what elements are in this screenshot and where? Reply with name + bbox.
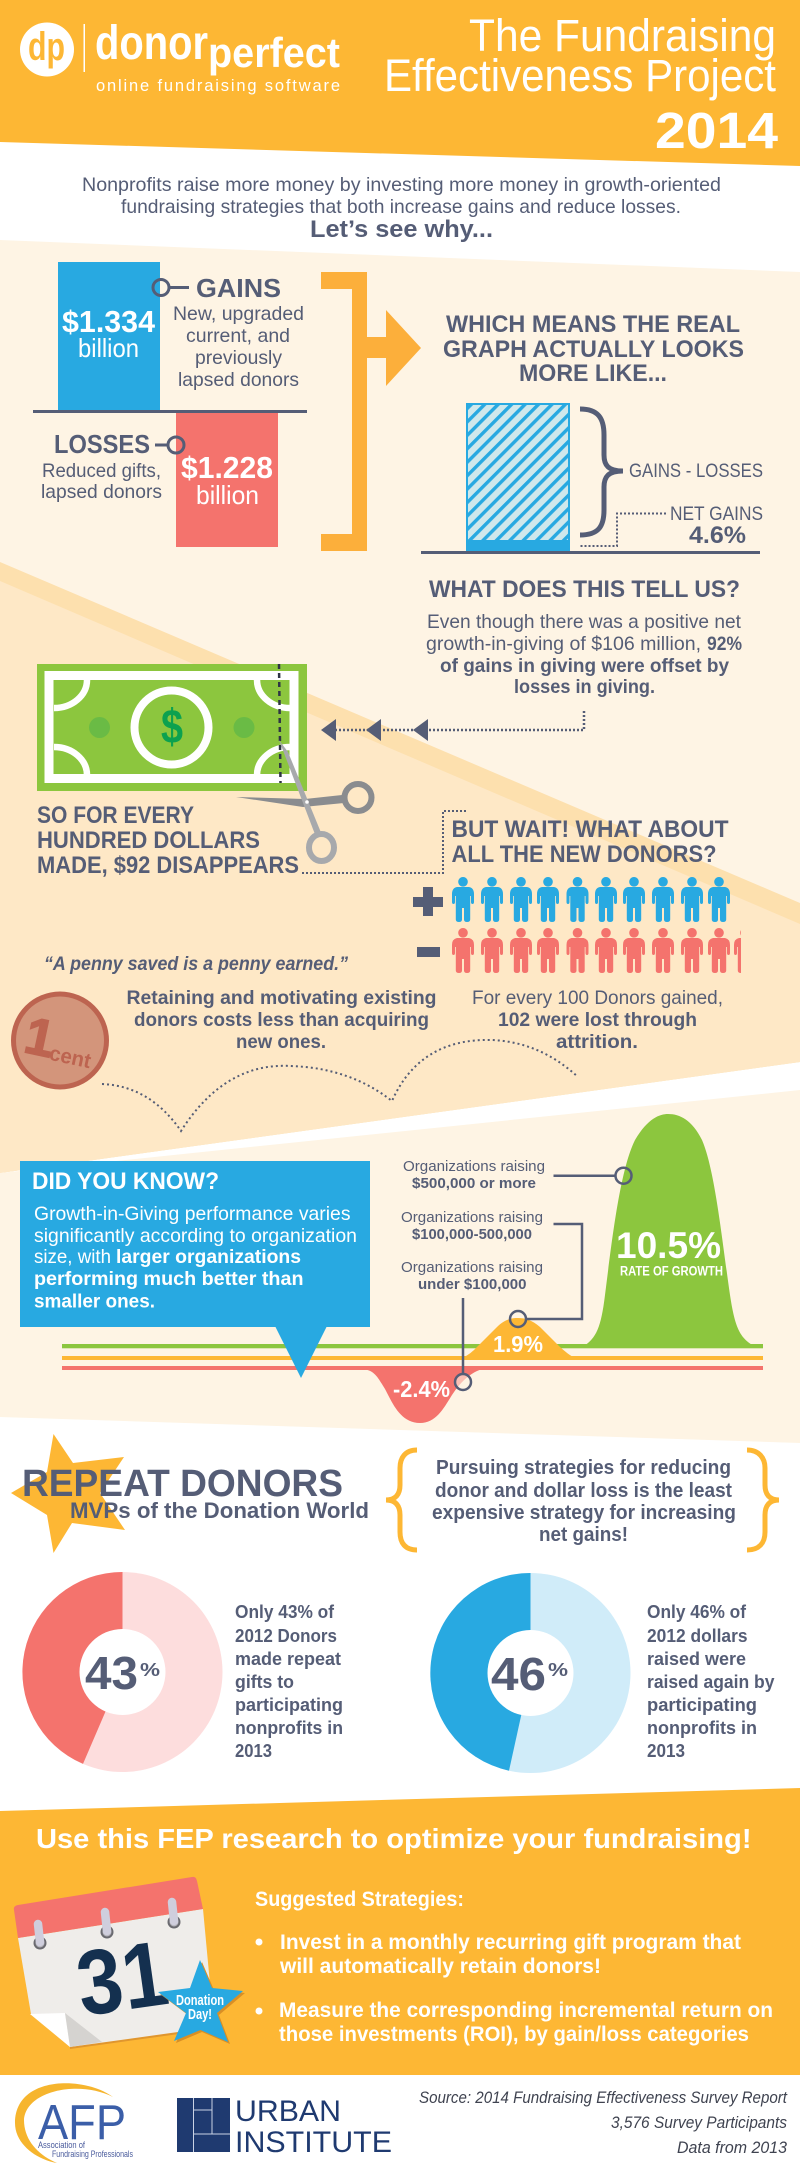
icon: star behind heading	[11, 1434, 125, 1553]
heading: use this research: Use this FEP research to optimize your fundraising!	[36, 1823, 751, 1854]
gains bar: billion	[78, 333, 139, 363]
callout: did you know: Growth-in-Giving performance varies	[34, 1203, 351, 1225]
callout: did you know: larger organizations	[116, 1246, 301, 1268]
callout: strategies in braces: donor and dollar loss is the least	[435, 1480, 732, 1502]
text: what does this tell us: Even though there was a positive net	[427, 611, 742, 633]
logo: AFP: AFP	[38, 2096, 126, 2150]
title: The Fundraising	[469, 10, 776, 61]
red dip: -2.4%	[393, 1376, 450, 1402]
source note: Data from 2013	[677, 2138, 787, 2157]
label: under $100,000: under $100,000	[418, 1276, 526, 1293]
heading: repeat donors: REPEAT DONORS	[22, 1463, 343, 1505]
callout: did you know: smaller ones.	[34, 1290, 155, 1312]
icon: dollar bill	[37, 664, 307, 791]
text: what does this tell us: of gains in giving were offset by	[440, 655, 729, 677]
dotted connector	[302, 811, 467, 873]
icon: donation day star: Donation	[176, 1992, 224, 2009]
text: 46% dollars raised: raised again by	[647, 1671, 775, 1692]
text: suggested strategies: Suggested Strategies:	[255, 1888, 464, 1911]
logo: Urban Institute	[177, 2095, 392, 2159]
net gains label: NET GAINS	[670, 503, 763, 525]
donut chart: 43%: 43	[85, 1647, 138, 1699]
text: suggested strategies: will automatically retain donors!	[279, 1955, 601, 1978]
callout: did you know	[20, 1161, 370, 1378]
losses bar: $1.228	[181, 450, 273, 485]
icon: donation day star	[158, 1960, 245, 2044]
logo: donorperfect: online fundraising software	[96, 77, 340, 95]
losses bar	[176, 412, 278, 547]
text: retaining donors	[126, 987, 436, 1053]
losses label	[41, 429, 184, 503]
donut chart: 43%: %	[140, 1660, 160, 1680]
donut chart: 46%: 46	[491, 1648, 546, 1700]
callout: did you know: DID YOU KNOW?	[32, 1168, 219, 1195]
icon: scissors	[236, 740, 372, 861]
intro text: Nonprofits raise more money by investing more money in growth-oriented	[82, 174, 721, 196]
label: $100,000-500,000: Organizations raising	[401, 1209, 543, 1226]
heading: real graph	[443, 311, 744, 387]
callout: did you know: size, with	[34, 1246, 111, 1268]
text: retaining donors: new ones.	[236, 1031, 326, 1053]
text: 43% repeat donors	[235, 1601, 343, 1761]
title	[384, 10, 779, 159]
text: 43% repeat donors: gifts to	[235, 1671, 294, 1692]
bracket arrow	[321, 272, 421, 551]
logo: Urban Institute: URBAN	[235, 2095, 341, 2128]
header banner	[0, 0, 800, 166]
text: 43% repeat donors: 2013	[235, 1740, 272, 1761]
losses label: LOSSES	[54, 429, 150, 459]
label: $500,000 or more	[403, 1158, 632, 1192]
text: 43% repeat donors: nonprofits in	[235, 1717, 343, 1738]
logo: AFP: Association of	[38, 2140, 85, 2151]
source note	[419, 2088, 788, 2157]
intro text: fundraising strategies that both increase gains and reduce losses.	[121, 196, 681, 218]
text: 43% repeat donors: made repeat	[235, 1648, 341, 1669]
icon: penny	[11, 992, 109, 1090]
heading: real graph: GRAPH ACTUALLY LOOKS	[443, 336, 744, 363]
logo: donorperfect: perfect	[208, 29, 340, 76]
callout: strategies in braces: net gains!	[539, 1524, 628, 1546]
text: 46% dollars raised: 2013	[647, 1740, 685, 1761]
orange peak: 1.9%	[493, 1331, 543, 1357]
callout: strategies in braces	[386, 1450, 779, 1550]
text: so for every hundred dollars	[37, 802, 299, 879]
gains label: current, and	[186, 325, 290, 347]
heading: real graph: WHICH MEANS THE REAL	[446, 311, 740, 338]
text: what does this tell us: WHAT DOES THIS TELL US?	[429, 576, 740, 603]
source note: 3,576 Survey Participants	[611, 2113, 787, 2132]
icon: dollar bill: $	[161, 701, 183, 754]
logo: AFP	[15, 2083, 133, 2163]
intro text	[82, 174, 721, 243]
people: donors gained	[452, 877, 730, 922]
calendar rings	[34, 1902, 180, 1948]
gains label: New, upgraded	[173, 303, 304, 325]
title: 2014	[655, 102, 779, 159]
text: 43% repeat donors: Only 43% of	[235, 1601, 335, 1622]
icon: penny: cent	[47, 1042, 93, 1073]
text: so for every hundred dollars: HUNDRED DOLLARS	[37, 827, 260, 854]
text: 43% repeat donors: 2012 Donors	[235, 1625, 337, 1646]
label: $500,000 or more: Organizations raising	[403, 1158, 545, 1175]
chart: net gains bar	[421, 404, 763, 554]
dotted bounce path	[102, 1040, 578, 1131]
text: attrition: For every 100 Donors gained,	[472, 987, 723, 1009]
text: attrition: 102 were lost through	[498, 1009, 697, 1031]
gains label: lapsed donors	[178, 369, 299, 391]
text: attrition: attrition.	[556, 1031, 638, 1053]
net gains label	[580, 503, 763, 549]
icon: donation day star: Day!	[188, 2006, 212, 2023]
callout: did you know: significantly according to organization	[34, 1225, 357, 1247]
brace: gains minus losses	[580, 409, 763, 535]
text: attrition	[472, 987, 723, 1053]
logo: donorperfect	[20, 17, 340, 95]
people: donors lost	[452, 928, 756, 973]
text: retaining donors: donors costs less than acquiring	[134, 1009, 429, 1031]
donut chart: 46%	[430, 1573, 630, 1773]
logo: donorperfect: dp	[28, 25, 65, 69]
heading: repeat donors	[22, 1463, 369, 1523]
losses label: Reduced gifts,	[42, 460, 161, 482]
callout: strategies in braces: Pursuing strategies for reducing	[436, 1457, 731, 1479]
callout: strategies in braces: expensive strategy for increasing	[432, 1502, 736, 1524]
text: what does this tell us: growth-in-giving of $106 million,	[426, 633, 701, 655]
brace: gains minus losses: GAINS - LOSSES	[629, 460, 763, 482]
logo: Urban Institute: INSTITUTE	[235, 2126, 392, 2159]
chart: growth by organization size	[62, 1114, 763, 1423]
dotted arrows	[321, 711, 584, 741]
text: what does this tell us: losses in giving.	[514, 676, 655, 698]
panel: call to action	[0, 1788, 800, 2075]
text: but wait	[452, 816, 729, 868]
icon: plus	[413, 887, 443, 916]
intro text: Let’s see why...	[310, 216, 493, 243]
green peak: 10.5%	[616, 1225, 721, 1266]
text: suggested strategies	[255, 1888, 773, 2046]
icon: penny: 1	[20, 1007, 60, 1069]
icon: minus	[417, 947, 440, 957]
logo: donorperfect: donor	[95, 17, 208, 70]
text: suggested strategies: Invest in a monthly recurring gift program that	[280, 1931, 741, 1954]
quote: “A penny saved is a penny earned.”	[44, 953, 348, 975]
text: what does this tell us	[426, 576, 742, 698]
chart: gains and losses	[33, 262, 307, 547]
text: 46% dollars raised: participating	[647, 1694, 757, 1715]
text: so for every hundred dollars: MADE, $92 DISAPPEARS	[37, 852, 299, 879]
green peak	[584, 1114, 754, 1346]
text: retaining donors: Retaining and motivating existing	[126, 987, 436, 1009]
text: so for every hundred dollars: SO FOR EVERY	[37, 802, 194, 829]
label: under $100,000: Organizations raising	[401, 1259, 543, 1276]
label: $500,000 or more: $500,000 or more	[412, 1175, 536, 1192]
growth lines	[62, 1344, 763, 1370]
gains label	[153, 273, 304, 391]
label: $100,000-500,000	[401, 1209, 582, 1327]
donut chart: 43%	[22, 1572, 223, 1772]
losses label: lapsed donors	[41, 481, 162, 503]
title: Effectiveness Project	[384, 50, 776, 101]
gains label: previously	[195, 347, 282, 369]
green peak: RATE OF GROWTH	[620, 1264, 723, 1278]
icon: calendar: 31	[71, 1922, 174, 2036]
text: what does this tell us: 92%	[707, 633, 742, 655]
label: under $100,000	[401, 1259, 543, 1390]
losses bar: billion	[196, 480, 259, 510]
heading: repeat donors: MVPs of the Donation World	[70, 1498, 369, 1523]
text: 46% dollars raised: Only 46% of	[647, 1601, 747, 1622]
text: 46% dollars raised	[647, 1601, 775, 1761]
gains bar: $1.334	[62, 304, 156, 339]
net gains label: 4.6%	[689, 522, 746, 549]
gains label: GAINS	[196, 273, 281, 303]
text: suggested strategies: those investments (ROI), by gain/loss categories	[279, 2023, 749, 2046]
text: 43% repeat donors: participating	[235, 1694, 343, 1715]
text: 46% dollars raised: raised were	[647, 1648, 746, 1669]
donut chart: 46%: %	[548, 1660, 568, 1680]
label: $100,000-500,000: $100,000-500,000	[412, 1226, 532, 1243]
text: 46% dollars raised: 2012 dollars	[647, 1625, 748, 1646]
text: but wait: BUT WAIT! WHAT ABOUT	[452, 816, 729, 843]
heading: real graph: MORE LIKE...	[519, 360, 667, 387]
gains bar	[58, 262, 160, 411]
orange peak	[457, 1318, 582, 1360]
icon: calendar	[14, 1877, 215, 2049]
callout: did you know: performing much better than	[34, 1268, 304, 1290]
text: but wait: ALL THE NEW DONORS?	[452, 841, 716, 868]
text: suggested strategies: Measure the corresponding incremental return on	[279, 1999, 773, 2022]
text: 46% dollars raised: nonprofits in	[647, 1717, 757, 1738]
logo: AFP: Fundraising Professionals	[52, 2149, 133, 2160]
red dip	[362, 1368, 485, 1423]
